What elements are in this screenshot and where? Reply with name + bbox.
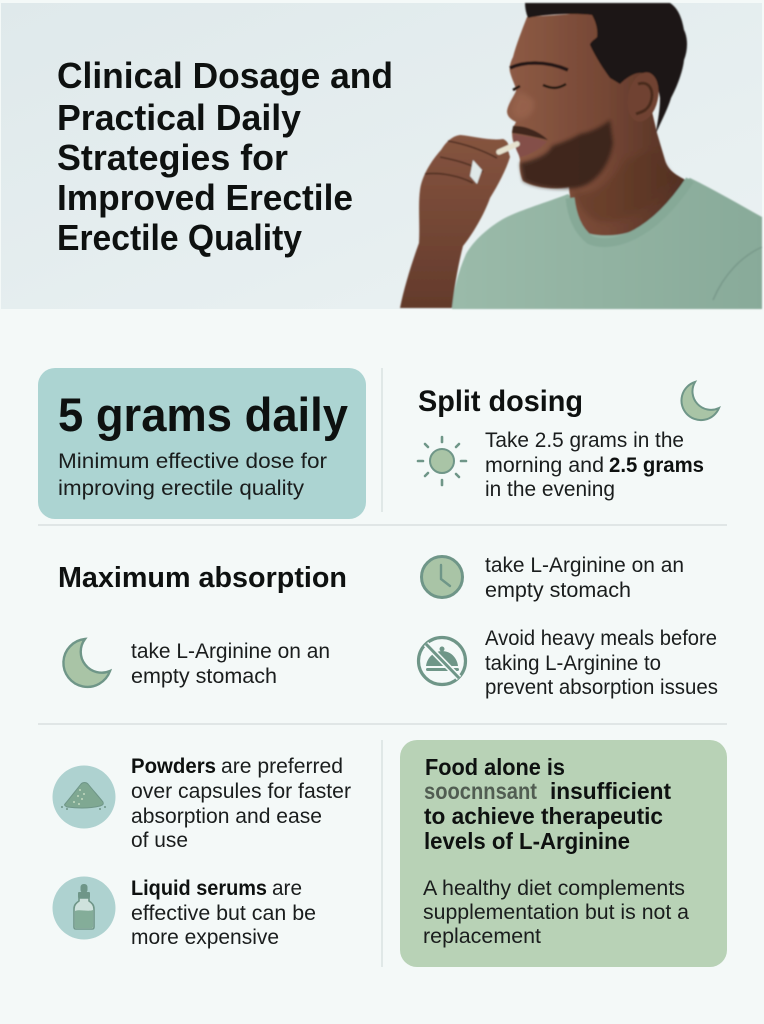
nose highlight: [513, 92, 534, 118]
callout heading: [424, 754, 671, 854]
callout heading: insufficient: [550, 778, 671, 804]
empty stomach text: take L-Arginine on an: [131, 640, 330, 663]
icon: clock: [422, 556, 462, 598]
capsule: [499, 144, 517, 152]
split dosing text: Take 2.5 grams in the: [485, 429, 684, 452]
liquid serums text: effective but can be: [131, 902, 316, 925]
title: Strategies for: [57, 137, 288, 178]
title: Practical Daily: [57, 97, 302, 138]
callout body: A healthy diet complements: [423, 877, 685, 900]
beard: [520, 120, 613, 189]
title: Erectile Quality: [57, 217, 303, 258]
avoid heavy meals text: taking L-Arginine to: [485, 652, 661, 675]
dose description: improving erectile quality: [58, 476, 304, 500]
eyebrows and eyes: [510, 63, 568, 70]
neck and face: [507, 12, 690, 236]
liquid serums text: [131, 877, 316, 949]
callout body: replacement: [423, 925, 541, 948]
callout heading: levels of L-Arginine: [424, 828, 630, 854]
header banner: [1, 3, 762, 309]
empty stomach text, right: take L-Arginine on an: [485, 554, 684, 577]
dose description: [58, 449, 327, 500]
panel: split dosing: [418, 382, 719, 501]
title: Improved Erectile: [57, 177, 353, 218]
forearm and hand: [400, 135, 510, 308]
split dosing text: [485, 429, 704, 501]
maximum absorption heading: Maximum absorption: [58, 562, 347, 594]
split dosing heading: Split dosing: [418, 385, 583, 418]
neck shadow: [572, 150, 672, 222]
icon: moon: [63, 639, 110, 687]
panel: supplement forms: [52, 755, 351, 949]
icon: no heavy meals: [418, 638, 466, 684]
callout body: supplementation but is not a: [423, 901, 689, 924]
dose description: Minimum effective dose for: [58, 449, 327, 473]
icon: powder: [52, 766, 116, 828]
empty stomach text: empty stomach: [131, 665, 277, 688]
liquid serums text: Liquid serums: [131, 877, 267, 900]
callout heading: Food alone is: [425, 754, 565, 780]
split dosing text: 2.5 grams: [609, 454, 704, 477]
powders text: over capsules for faster: [131, 780, 351, 803]
dose heading: 5 grams daily: [58, 388, 348, 441]
fingers: [425, 141, 497, 183]
powders text: are preferred: [221, 755, 343, 778]
icon: moon: [681, 382, 719, 420]
split dosing text: morning and: [485, 454, 604, 477]
powders text: [131, 755, 351, 852]
empty stomach text, right: empty stomach: [485, 579, 631, 602]
photo: man taking a capsule: [400, 3, 762, 309]
callout body: [423, 877, 689, 948]
split dosing text: in the evening: [485, 478, 615, 501]
callout heading: soocnnsant: [424, 778, 537, 804]
icon: serum bottle: [52, 876, 116, 940]
title: Clinical Dosage and: [57, 55, 393, 96]
shirt: [452, 178, 762, 309]
title: [57, 55, 393, 258]
icon: sun: [418, 437, 466, 485]
panel: 5 grams daily: [38, 368, 366, 519]
shirt collar: [570, 180, 690, 243]
panel: food alone callout: [400, 740, 727, 967]
powders text: of use: [131, 829, 188, 852]
moustache and lips: [512, 126, 548, 140]
panel: maximum absorption: [58, 554, 718, 699]
empty stomach text, right: [485, 554, 684, 602]
powders text: Powders: [131, 755, 216, 778]
hair: [525, 3, 687, 133]
liquid serums text: are: [272, 877, 302, 900]
empty stomach text: [131, 640, 330, 688]
avoid heavy meals text: [485, 627, 718, 699]
avoid heavy meals text: Avoid heavy meals before: [485, 627, 717, 650]
powders text: absorption and ease: [131, 805, 322, 828]
avoid heavy meals text: prevent absorption issues: [485, 676, 718, 699]
ear: [623, 69, 663, 125]
callout heading: to achieve therapeutic: [424, 803, 663, 829]
liquid serums text: more expensive: [131, 926, 279, 949]
